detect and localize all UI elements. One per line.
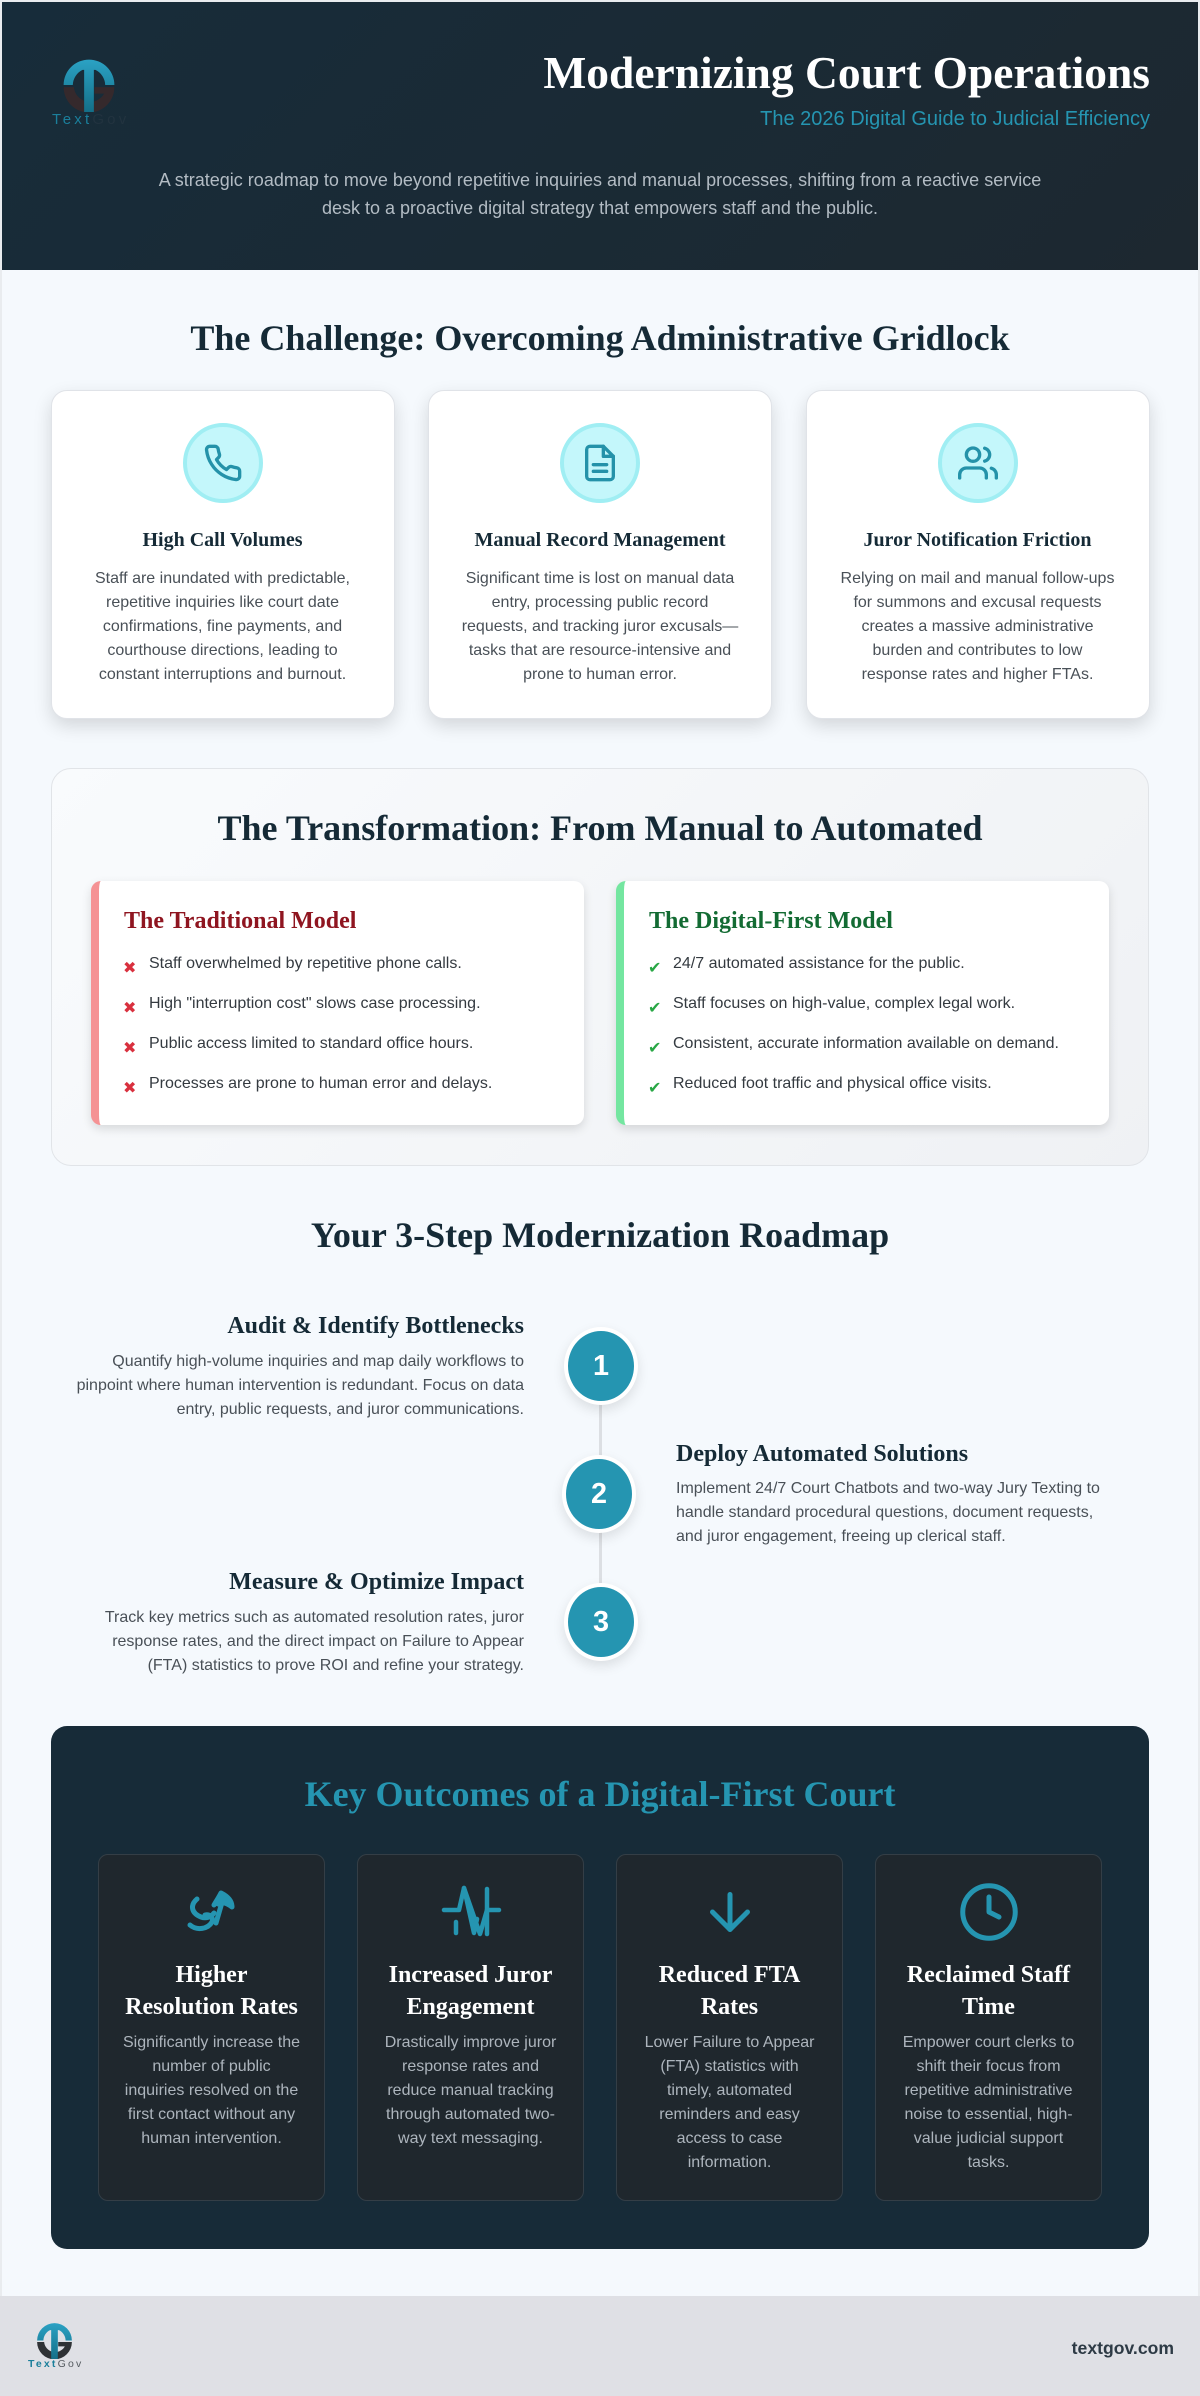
outcome text: information. bbox=[688, 2154, 771, 2171]
outcome title: Reclaimed Staff bbox=[907, 1962, 1070, 1988]
card text: entry, processing public record bbox=[492, 594, 708, 610]
icon: document bbox=[560, 423, 640, 503]
outcome text: timely, automated bbox=[667, 2082, 792, 2099]
icon: phone bbox=[182, 423, 262, 503]
step 1 text bbox=[77, 1313, 524, 1418]
outcome title: Higher bbox=[176, 1962, 248, 1988]
list item: Public access limited to standard office hours. bbox=[149, 1035, 473, 1052]
step 1 number bbox=[564, 1327, 638, 1405]
card: high call volumes bbox=[50, 390, 394, 719]
card text: for summons and excusal requests bbox=[853, 594, 1102, 610]
outcome text: Drastically improve juror bbox=[385, 2034, 556, 2051]
icon: distorted dollar bbox=[188, 1890, 234, 1932]
icon: users bbox=[938, 423, 1018, 503]
outcome title bbox=[389, 1962, 552, 2020]
header logo bbox=[52, 60, 129, 128]
list item: Reduced foot traffic and physical office visits. bbox=[673, 1075, 992, 1092]
card text: requests, and tracking juror excusals— bbox=[462, 618, 738, 634]
list item: ✖ bbox=[123, 998, 136, 1017]
card text: Staff are inundated with predictable, bbox=[95, 570, 350, 586]
card title: Manual Record Management bbox=[474, 529, 726, 551]
heading: key outcomes: Key Outcomes of a Digital-First Court bbox=[305, 1774, 895, 1814]
step 1 number: 1 bbox=[593, 1350, 609, 1382]
outcome text: repetitive administrative bbox=[904, 2082, 1073, 2099]
panel: traditional model bbox=[91, 881, 584, 1125]
list item: Staff overwhelmed by repetitive phone calls. bbox=[149, 955, 462, 972]
card title: Juror Notification Friction bbox=[863, 529, 1092, 551]
card text: Relying on mail and manual follow-ups bbox=[841, 570, 1114, 586]
list item: High "interruption cost" slows case processing. bbox=[149, 995, 481, 1012]
list item: ✖ bbox=[123, 1038, 136, 1057]
step 2 description: handle standard procedural questions, document requests, bbox=[676, 1504, 1093, 1521]
outcome text: inquiries resolved on the bbox=[125, 2082, 298, 2099]
card text: courthouse directions, leading to bbox=[107, 642, 338, 658]
list item: ✔ bbox=[648, 998, 661, 1017]
list item: ✔ bbox=[648, 1038, 661, 1057]
footer bbox=[0, 2296, 1200, 2396]
intro text bbox=[158, 170, 1041, 218]
step 3 title: Measure & Optimize Impact bbox=[229, 1569, 524, 1595]
outcome text: value judicial support bbox=[914, 2130, 1063, 2147]
card text: constant interruptions and burnout. bbox=[99, 666, 346, 682]
list item: ✖ bbox=[123, 1078, 136, 1097]
list item: ✖ bbox=[123, 958, 136, 977]
outcome text: human intervention. bbox=[141, 2130, 282, 2147]
panel: the transformation bbox=[51, 768, 1149, 1166]
step 2 description: and juror engagement, freeing up clerical staff. bbox=[676, 1528, 1006, 1545]
outcome text: Empower court clerks to bbox=[903, 2034, 1074, 2051]
step 1 description: Quantify high-volume inquiries and map daily workflows to bbox=[112, 1353, 524, 1370]
intro text: A strategic roadmap to move beyond repetitive inquiries and manual processes, shifting from a reactive service bbox=[159, 170, 1041, 190]
card text: response rates and higher FTAs. bbox=[862, 666, 1093, 682]
outcome text: reduce manual tracking bbox=[387, 2082, 554, 2099]
outcome text: shift their focus from bbox=[916, 2058, 1061, 2075]
header logo wordmark: TextGov bbox=[52, 111, 129, 128]
step 1 description bbox=[77, 1353, 524, 1418]
step 2 description: Implement 24/7 Court Chatbots and two-way Jury Texting to bbox=[676, 1480, 1100, 1497]
subtitle: The 2026 Digital Guide to Judicial Efficiency bbox=[760, 108, 1150, 130]
list item: ✔ bbox=[648, 1078, 661, 1097]
footer logo wordmark: TextGov bbox=[28, 2358, 83, 2370]
panel: digital-first model bbox=[616, 881, 1109, 1125]
outcome: higher resolution rates bbox=[98, 1854, 325, 2201]
outcome text: first contact without any bbox=[128, 2106, 295, 2123]
timeline connector one bbox=[599, 1404, 602, 1456]
heading: roadmap: Your 3-Step Modernization Roadmap bbox=[311, 1215, 889, 1255]
outcome title: Reduced FTA bbox=[659, 1962, 800, 1988]
outcome text: reminders and easy bbox=[659, 2106, 800, 2123]
outcome text bbox=[385, 2034, 556, 2147]
card text: Significant time is lost on manual data bbox=[466, 570, 734, 586]
model title: The Traditional Model bbox=[124, 908, 356, 934]
outcome title bbox=[659, 1962, 800, 2020]
icon: arrow down bbox=[710, 1892, 750, 1932]
step 3 description: response rates, and the direct impact on Failure to Appear bbox=[112, 1633, 524, 1650]
outcome: increased juror engagement bbox=[357, 1854, 584, 2201]
step 2 title: Deploy Automated Solutions bbox=[676, 1441, 968, 1467]
step 3 number bbox=[564, 1583, 638, 1661]
header banner bbox=[2, 2, 1198, 270]
outcome text bbox=[123, 2034, 300, 2147]
outcome text: Lower Failure to Appear bbox=[645, 2034, 814, 2051]
model title: The Digital-First Model bbox=[649, 908, 893, 934]
outcome title: Engagement bbox=[406, 1994, 534, 2020]
panel: key outcomes bbox=[51, 1726, 1149, 2249]
list item: Consistent, accurate information available on demand. bbox=[673, 1035, 1059, 1052]
list item: 24/7 automated assistance for the public. bbox=[673, 955, 965, 972]
outcome title bbox=[907, 1962, 1070, 2020]
card: juror notification friction bbox=[806, 390, 1150, 719]
outcome title: Time bbox=[962, 1994, 1015, 2020]
heading: the challenge: The Challenge: Overcoming Administrative Gridlock bbox=[190, 318, 1010, 358]
list item: Staff focuses on high-value, complex legal work. bbox=[673, 995, 1015, 1012]
outcome: reclaimed staff time bbox=[875, 1854, 1102, 2201]
step 2 number bbox=[562, 1455, 636, 1533]
step 3 number: 3 bbox=[593, 1606, 609, 1638]
step 2 description bbox=[676, 1480, 1100, 1545]
outcome title bbox=[125, 1962, 298, 2020]
outcome text: (FTA) statistics with bbox=[660, 2058, 799, 2075]
outcome text: way text messaging. bbox=[398, 2130, 543, 2147]
step 2 text bbox=[676, 1441, 1100, 1545]
footer website: textgov.com bbox=[1072, 2338, 1174, 2358]
timeline connector two bbox=[599, 1532, 602, 1584]
card text: burden and contributes to low bbox=[873, 642, 1082, 658]
card text: creates a massive administrative bbox=[861, 618, 1094, 634]
card text: repetitive inquiries like court date bbox=[106, 594, 339, 610]
card text: confirmations, fine payments, and bbox=[103, 618, 342, 634]
step 3 description: (FTA) statistics to prove ROI and refine your strategy. bbox=[148, 1657, 524, 1674]
outcome text: tasks. bbox=[968, 2154, 1009, 2171]
step 1 description: entry, public requests, and juror communications. bbox=[177, 1401, 524, 1418]
outcome: reduced fta rates bbox=[616, 1854, 843, 2201]
outcome text: number of public bbox=[152, 2058, 271, 2075]
list item: ✔ bbox=[648, 958, 661, 977]
card title: High Call Volumes bbox=[142, 529, 303, 551]
outcome title: Resolution Rates bbox=[125, 1994, 298, 2020]
footer logo bbox=[28, 2323, 83, 2370]
icon: clock bbox=[960, 1883, 1018, 1941]
main title: Modernizing Court Operations bbox=[543, 47, 1150, 98]
heading: the transformation: The Transformation: From Manual to Automated bbox=[218, 808, 982, 848]
outcome text: Significantly increase the bbox=[123, 2034, 300, 2051]
step 1 title: Audit & Identify Bottlenecks bbox=[227, 1313, 524, 1339]
list item: Processes are prone to human error and delays. bbox=[149, 1075, 492, 1092]
outcome text bbox=[903, 2034, 1074, 2171]
outcome title: Rates bbox=[701, 1994, 758, 2020]
step 1 description: pinpoint where human intervention is redundant. Focus on data bbox=[77, 1377, 524, 1394]
outcome text: access to case bbox=[677, 2130, 782, 2147]
card text: prone to human error. bbox=[523, 666, 677, 682]
icon: distorted activity bbox=[442, 1886, 502, 1936]
outcome text: response rates and bbox=[402, 2058, 539, 2075]
step 3 description bbox=[105, 1609, 524, 1674]
card text bbox=[841, 570, 1114, 682]
outcome title: Increased Juror bbox=[389, 1962, 552, 1988]
step 2 number: 2 bbox=[591, 1478, 607, 1510]
card text bbox=[95, 570, 350, 682]
card text bbox=[462, 570, 738, 682]
outcome text bbox=[645, 2034, 814, 2171]
step 3 description: Track key metrics such as automated resolution rates, juror bbox=[105, 1609, 524, 1626]
intro text: desk to a proactive digital strategy that empowers staff and the public. bbox=[322, 198, 878, 218]
card text: tasks that are resource-intensive and bbox=[469, 642, 731, 658]
outcome text: noise to essential, high- bbox=[904, 2106, 1073, 2123]
step 3 text bbox=[105, 1569, 524, 1674]
card: manual record management bbox=[428, 390, 772, 719]
outcome text: through automated two- bbox=[386, 2106, 555, 2123]
